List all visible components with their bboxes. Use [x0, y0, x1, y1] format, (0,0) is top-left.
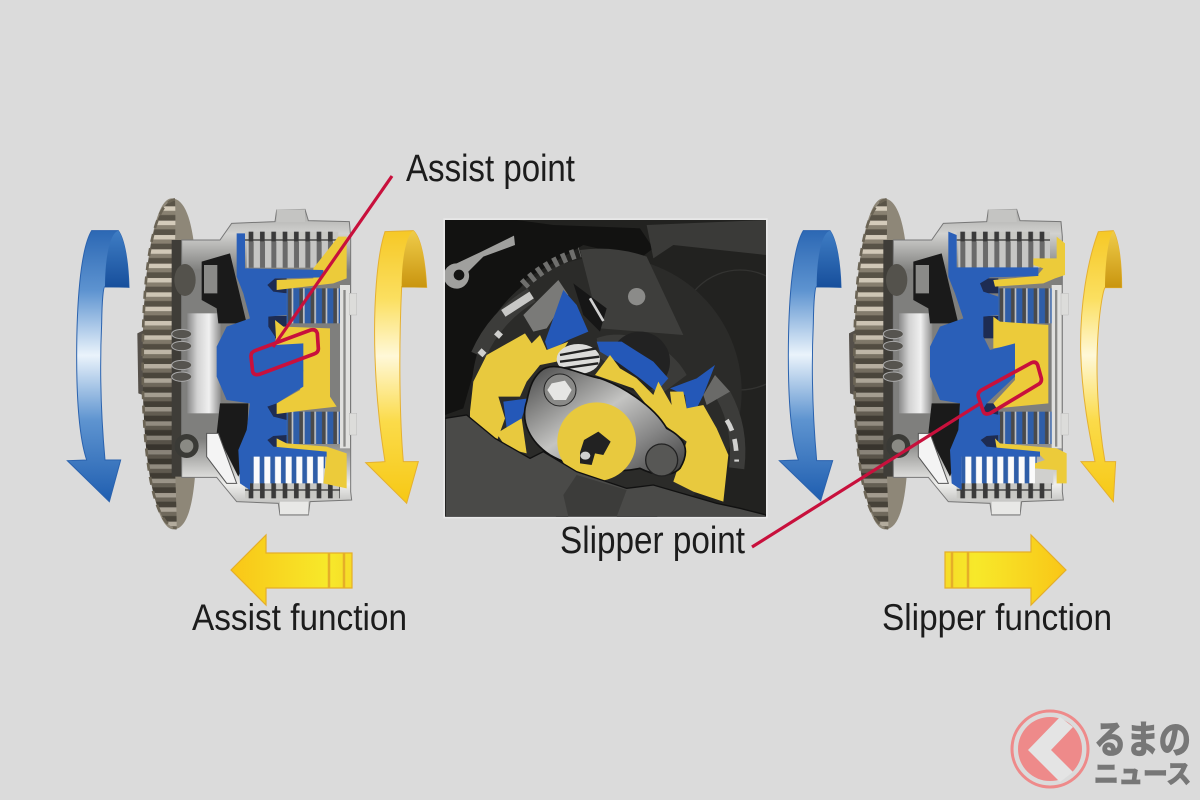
icon: logo roundel: [1012, 711, 1088, 787]
arrow: assist function direction: [231, 535, 352, 605]
icon: yellow rotation arrow, right: [1081, 231, 1122, 502]
slipper point highlight box: [978, 362, 1041, 414]
icon: blue rotation arrow, left: [67, 231, 129, 502]
gear and housing: [137, 198, 357, 529]
icon: yellow rotation arrow, left: [366, 231, 427, 503]
yellow clutch parts: [470, 333, 728, 502]
logo watermark: [1012, 711, 1191, 789]
heading: assist point: Assist point: [406, 148, 575, 190]
lower cover: [445, 415, 766, 517]
logo text: news: ニュース: [1094, 759, 1191, 789]
label: slipper function: Slipper function: [882, 597, 1112, 638]
right clutch assembly: slipper function: [849, 198, 1068, 529]
infographic: [66, 154, 1190, 788]
retaining plate with bolts: [525, 367, 685, 475]
slipper point leader line: [752, 403, 981, 547]
yellow pressure plate: [275, 237, 347, 488]
icon: blue rotation arrow, right: [779, 231, 841, 501]
blue clutch parts: [503, 290, 715, 428]
spring: [557, 344, 600, 374]
label: assist function: Assist function: [192, 597, 407, 638]
gear and housing: [849, 198, 1068, 529]
heading: slipper point: Slipper point: [560, 520, 745, 562]
arrow: slipper function direction: [945, 535, 1066, 605]
centre photo of clutch: [444, 218, 768, 518]
assist point leader line: [273, 176, 392, 347]
gray clutch plates: [523, 280, 568, 332]
assist point highlight box: [251, 330, 318, 375]
left clutch assembly: assist function: [137, 198, 357, 529]
blue clutch centre: [930, 232, 1040, 490]
blue clutch centre: [217, 233, 327, 490]
yellow pressure plate: [993, 237, 1067, 483]
